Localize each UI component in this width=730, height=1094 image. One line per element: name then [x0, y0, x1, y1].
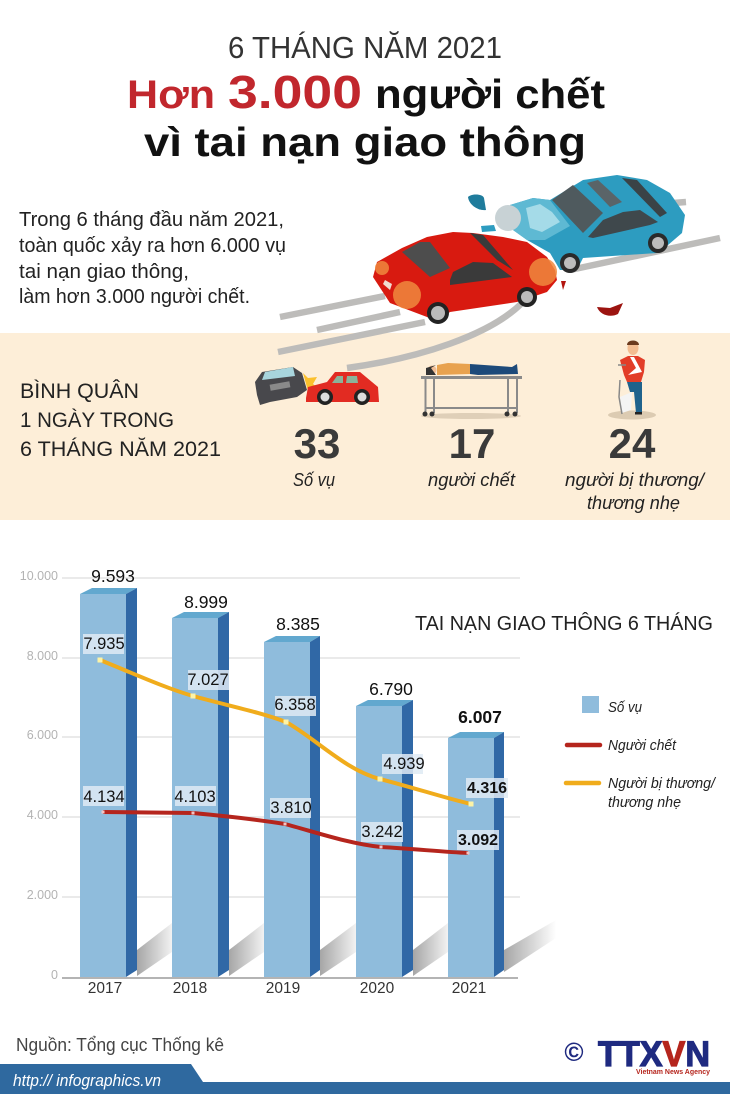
bar value labels: 6.790	[369, 679, 413, 699]
blue car	[510, 175, 685, 270]
bar 2019	[264, 636, 320, 977]
intro text: toàn quốc xảy ra hơn 6.000 vụ	[19, 235, 286, 257]
stats heading: BÌNH QUÂN	[20, 380, 139, 403]
stats numbers: 33	[294, 420, 340, 467]
logo: TTXVN: TTXVN	[598, 1035, 710, 1074]
stats numbers: 17	[449, 420, 495, 467]
legend: Người chết	[608, 737, 677, 754]
title	[127, 30, 605, 165]
chart: 4.316	[467, 780, 507, 797]
legend: Người bị thương/	[608, 775, 717, 792]
logo: TTXVN: Vietnam News Agency	[636, 1067, 711, 1076]
chart title: TAI NẠN GIAO THÔNG 6 THÁNG	[415, 612, 713, 635]
footer bar	[0, 1064, 730, 1094]
bar 2021	[448, 732, 504, 977]
gridlines	[62, 578, 520, 897]
y axis labels: 8.000	[27, 649, 58, 663]
icon: two cars collision	[255, 367, 379, 405]
bar value labels	[91, 566, 502, 727]
line value labels	[83, 634, 508, 850]
beige band	[0, 333, 730, 520]
illustration: car crash	[278, 175, 720, 368]
legend: thương nhẹ	[608, 794, 681, 811]
icon: injured person	[608, 340, 656, 420]
x axis labels	[88, 980, 486, 997]
y axis labels: 0	[51, 968, 58, 982]
chart	[20, 566, 556, 997]
legend: Số vụ	[608, 699, 643, 716]
icon: person on stretcher	[421, 363, 522, 419]
bar 2020	[356, 700, 413, 977]
chart: 6.358	[274, 696, 316, 714]
intro text	[19, 209, 286, 308]
title: 6 THÁNG NĂM 2021	[228, 30, 502, 65]
title: vì tai nạn giao thông	[144, 119, 586, 165]
chart: 4.134	[83, 788, 125, 806]
x axis labels: 2020	[360, 980, 395, 997]
x axis labels: 2017	[88, 980, 122, 997]
stats numbers: 24	[609, 420, 656, 467]
bar value labels: 6.007	[458, 707, 502, 727]
x axis labels: 2019	[266, 980, 300, 997]
title: Hơn	[127, 73, 215, 117]
chart: 4.939	[383, 755, 425, 773]
y axis labels: 10.000	[20, 569, 58, 583]
footer bar: http:// infographics.vn	[13, 1071, 161, 1090]
line: injured	[98, 658, 474, 806]
chart: 7.027	[187, 671, 229, 689]
y axis labels: 4.000	[27, 808, 58, 822]
line: deaths	[102, 810, 470, 854]
stats labels: người bị thương/	[565, 470, 706, 490]
bar value labels: 8.999	[184, 592, 228, 612]
stats labels: Số vụ	[293, 470, 335, 490]
stats labels: người chết	[428, 470, 516, 490]
stats numbers	[294, 420, 656, 467]
source: Nguồn: Tổng cục Thống kê	[16, 1035, 224, 1055]
y axis labels: 2.000	[27, 888, 58, 902]
stats heading: 6 THÁNG NĂM 2021	[20, 438, 221, 461]
y axis labels: 6.000	[27, 728, 58, 742]
bar value labels: 9.593	[91, 566, 135, 586]
bar value labels: 8.385	[276, 614, 320, 634]
legend	[566, 696, 717, 811]
title: người chết	[375, 71, 605, 117]
intro text: tai nạn giao thông,	[19, 261, 189, 283]
title: 3.000	[228, 66, 362, 118]
stats heading	[20, 380, 221, 461]
intro text: làm hơn 3.000 người chết.	[19, 286, 250, 308]
bar shadows	[137, 920, 556, 976]
logo: TTXVN: ©	[564, 1037, 584, 1067]
x axis labels: 2018	[173, 980, 207, 997]
bar 2017	[80, 588, 137, 977]
y axis labels	[20, 569, 58, 982]
stats labels	[293, 470, 706, 513]
red car	[373, 232, 557, 322]
chart: 3.810	[270, 799, 312, 817]
chart: 7.935	[83, 635, 125, 653]
chart: 3.242	[361, 823, 403, 841]
baseline	[62, 977, 518, 979]
intro text: Trong 6 tháng đầu năm 2021,	[19, 209, 284, 231]
chart: 4.103	[174, 788, 216, 806]
x axis labels: 2021	[452, 980, 486, 997]
stats labels: thương nhẹ	[587, 493, 680, 513]
bar 2018	[172, 612, 229, 977]
chart: 3.092	[458, 832, 498, 849]
stats heading: 1 NGÀY TRONG	[20, 409, 174, 432]
